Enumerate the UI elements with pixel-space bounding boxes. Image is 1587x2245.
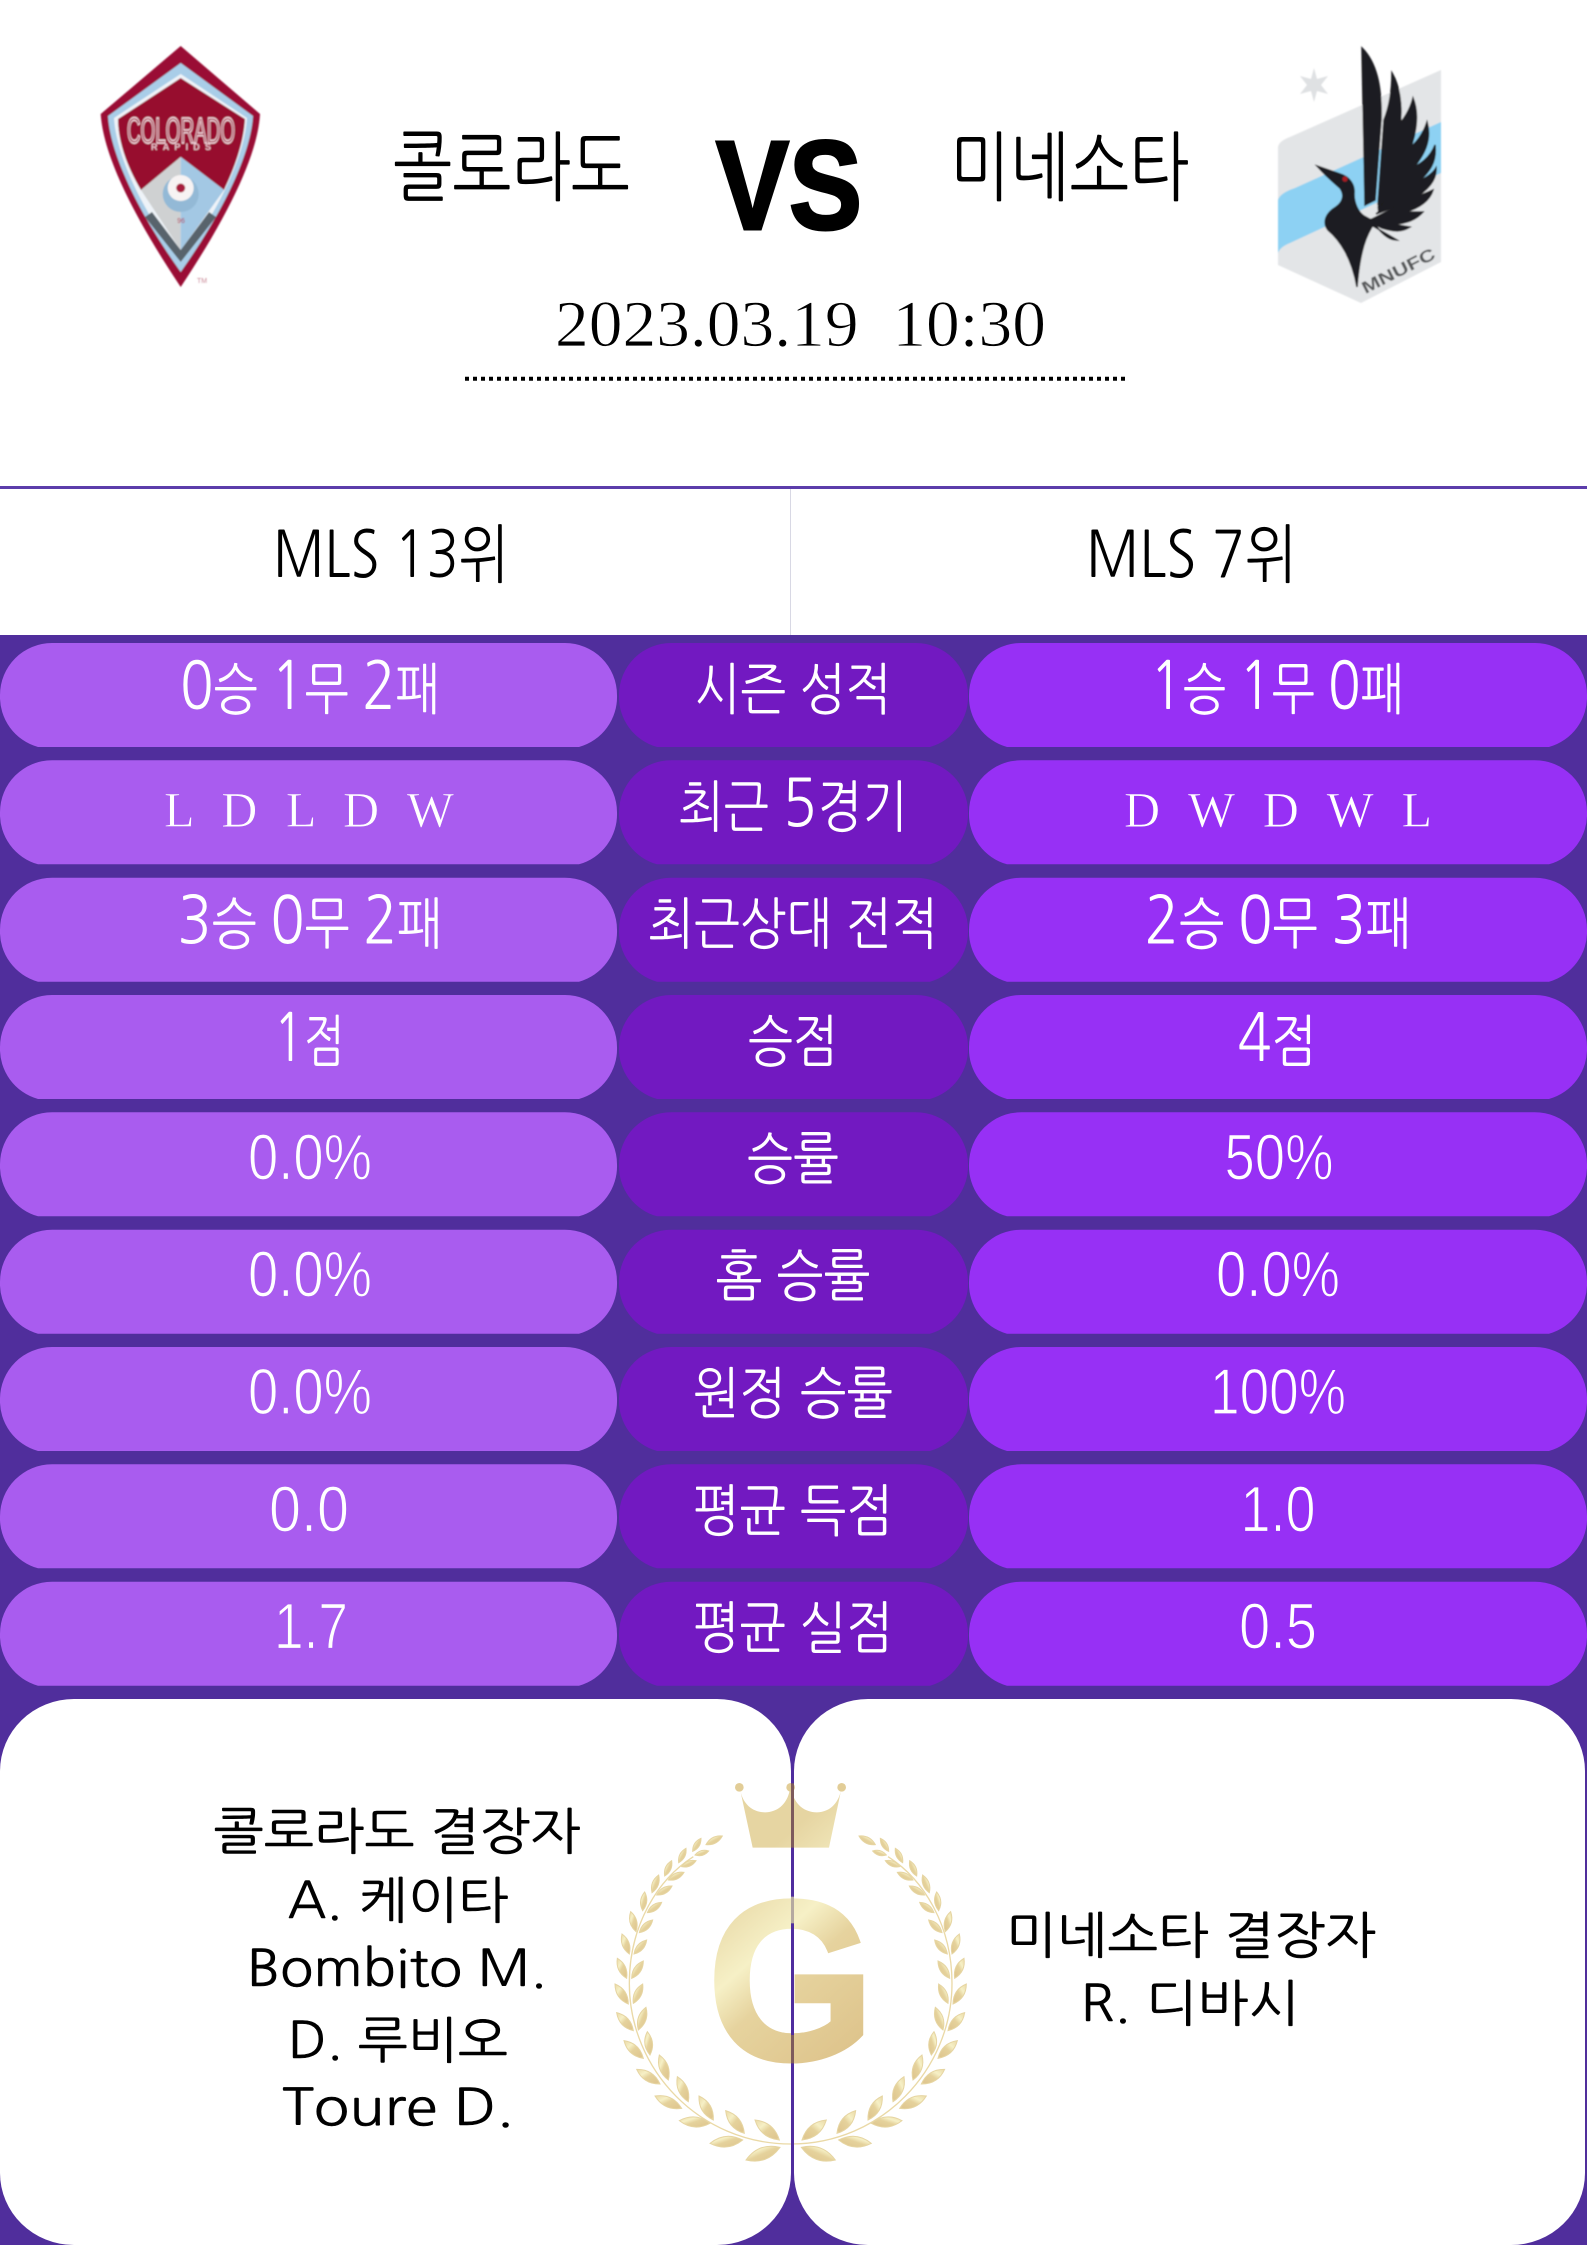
text: home absentee list: D. 루비오 [288,2016,508,2066]
row: win rate: 50% [1224,1120,1334,1193]
row: last five games [0,760,1587,864]
row: away win rate: 100% [1210,1355,1346,1428]
row: average goals scored: 평균 득점 [693,1483,893,1539]
text: away absentee list: 미네소타 결장자 [1006,1911,1376,1961]
icon: Minnesota United crest: MNUFC [1359,244,1438,298]
row: head to head record: 2승 0무 3패 [1144,888,1412,954]
row: head to head record: 3승 0무 2패 [178,888,442,954]
row: last five games: L D L D W [164,781,455,837]
panel: purple stats background [0,635,1587,2245]
icon: Colorado Rapids crest: 96 [177,218,185,225]
row: head to head record [0,878,1587,982]
icon: gold letter G: G [708,1855,874,2108]
row: points: 승점 [748,1014,838,1070]
row: average goals scored: 0.0 [269,1472,349,1545]
row: points: 4점 [1238,1005,1316,1071]
row: home win rate: 0.0% [248,1238,372,1311]
panel: white header background [0,0,1587,486]
row: head to head record: 최근상대 전적 [648,897,938,953]
icon: Colorado Rapids crest: TM [197,278,207,285]
row: season record [0,643,1587,747]
text: home absentee list: A. 케이타 [288,1876,508,1926]
row: away win rate [0,1347,1587,1451]
text: away absentee list: R. 디바시 [1080,1979,1300,2029]
row: last five games: D W D W L [1124,781,1432,837]
text: away absentee list [1006,1911,1376,2029]
panel: home absentees [0,1699,791,2245]
icon: Colorado Rapids crest [101,46,260,287]
panel: league rank bar [0,486,1587,635]
text: home absentee list: 콜로라도 결장자 [214,1807,580,1857]
row: win rate [0,1112,1587,1216]
text: match date and time: 2023.03.19 10:30 [555,288,1046,361]
row: points [0,995,1587,1099]
row: home win rate: 0.0% [1216,1238,1340,1311]
divider: centre line through emblem [791,1740,794,2200]
divider: dotted underline [465,377,1125,381]
row: average goals conceded [0,1582,1587,1686]
row: average goals conceded: 1.7 [274,1590,348,1663]
row: season record: 시즌 성적 [694,662,892,718]
icon: left laurel branch [615,1836,791,2161]
row: season record: 1승 1무 0패 [1150,653,1404,719]
row: average goals conceded: 0.5 [1239,1590,1317,1663]
row: average goals scored: 1.0 [1240,1472,1316,1545]
row: win rate: 0.0% [248,1120,372,1193]
heading: home team name: 콜로라도 [393,129,630,205]
icon: gold laurel crown G emblem [615,1740,966,2200]
icon: Minnesota United crest [1278,48,1441,303]
row: win rate: 승률 [747,1131,839,1187]
row: home win rate [0,1230,1587,1334]
text: home league rank: MLS 13위 [273,523,509,587]
text: away league rank: MLS 7위 [1086,523,1297,587]
row: season record: 0승 1무 2패 [180,653,440,719]
row: home win rate: 홈 승률 [716,1249,870,1305]
icon: Colorado Rapids crest: RAPIDS [151,142,211,152]
row: last five games: 최근 5경기 [678,770,908,836]
row: points: 1점 [274,1005,344,1071]
icon: crown [735,1783,846,1848]
icon: right laurel branch [791,1836,966,2161]
heading: away team name: 미네소타 [950,129,1189,205]
row: average goals conceded: 평균 실점 [693,1601,893,1657]
text: home absentee list: Bombito M. [247,1944,547,1994]
text: home absentee list: Toure D. [282,2083,514,2133]
row: away win rate: 0.0% [248,1355,372,1428]
text: home absentee list [214,1807,580,2133]
panel: away absentees [794,1699,1585,2245]
heading: VS: VS [716,115,862,256]
row: away win rate: 원정 승률 [693,1366,893,1422]
icon: Colorado Rapids crest: COLORADO [127,110,235,151]
row: average goals scored [0,1464,1587,1568]
